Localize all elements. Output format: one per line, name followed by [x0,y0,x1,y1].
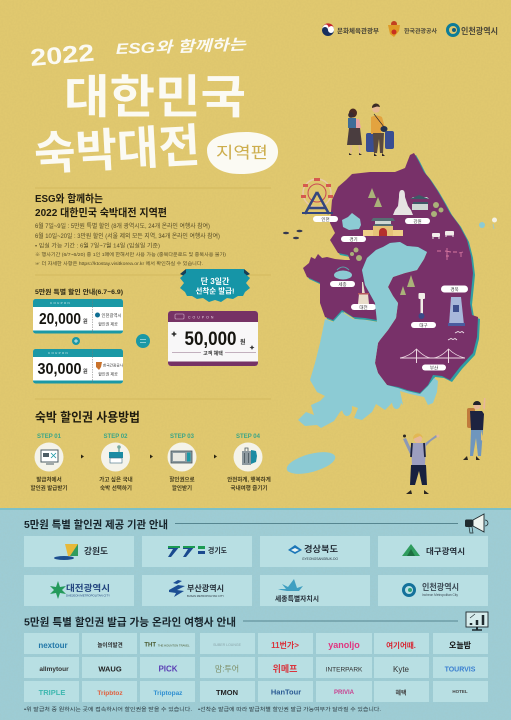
coupon: 30,000 [33,349,124,384]
ribbon badge: 단 3일간 [201,276,230,286]
coupon: 50,000: 원 [240,338,246,346]
agency cards row 1: nextour [38,641,68,650]
coupon: 30,000: 한국관광공사 [103,362,124,368]
icon: megaphone [465,514,488,533]
institution card: 경상북도: 경상북도 [304,544,338,554]
agency cards row 2: WAUG [98,664,122,674]
step 2: 숙박 선택하기 [100,484,132,492]
traveler: cheering person [403,433,440,494]
title: ESG와 함께하는 [116,36,248,58]
institution card: 대구광역시: 대구광역시 [426,546,465,556]
step 2: STEP 02 [104,434,128,440]
map: Sejong pond and label [330,267,355,288]
coupon: 50,000 [168,311,258,366]
institution card: 인천광역시: Incheon Metropolitan City [422,593,458,597]
footnote [24,705,381,713]
institution card: 경기도: 경기도 [208,545,227,555]
agency cards row 1: yanoljo [328,640,360,650]
agency cards row 3: Tripbtoz [97,690,123,697]
coupon: 30,000: COUPON [48,351,69,355]
section heading: institutions: 5만원 특별 할인권 제공 기관 안내 [24,518,168,531]
coupon: 20,000: 20,000 [39,311,81,328]
how-to heading: 숙박 할인권 사용방법 [35,410,140,424]
map: Incheon label [313,216,338,222]
agency cards row 3: Triptopaz [154,690,183,697]
coupon: 20,000 [33,299,123,334]
agency cards row 2: 위메프 [273,663,297,674]
coupon: 20,000: COUPON [50,301,71,305]
map: Sejong pond and label: 세종 [338,281,347,288]
agency cards row 3: TMON [216,688,238,697]
institution card: 대전광역시: DAEJEON METROPOLITAN CITY [66,594,110,598]
footnote: •위 발급처 중 원하시는 곳에 접속하시어 할인권을 받을 수 있습니다. [24,705,192,713]
institution card: 인천광역시: 인천광역시 [422,582,459,592]
ribbon badge: 선착순 발급! [195,286,235,296]
info text: 6월 10일~20일 : 3만원 할인 (서울 제외 모든 지역, 34개 온라인 여행사 참여) [35,232,220,240]
map: Daegu tower and label: 대구 [419,322,428,329]
arrow [214,454,217,458]
arrow [81,454,84,458]
info heading: 2022 대한민국 숙박대전 지역편 [35,206,167,219]
logo: 인천광역시: 인천광역시 [461,26,498,36]
coupon: 50,000: 50,000 [184,329,236,350]
map: pink flowers [437,248,463,260]
institution card: 세종특별자치시 [260,575,370,606]
map: Gangwon label [405,218,430,224]
map: lake and Gyeonggi icons [342,213,403,236]
agency cards row 3: HOTEL [452,689,468,694]
institution card: 대전광역시: 대전광역시 [66,583,110,593]
institution card: 경기도 [142,536,252,567]
plus circle [72,337,80,345]
step 4 [227,434,271,492]
ribbon badge [180,269,250,302]
agency cards row 1: THT THE HOUNTON TRAVEL [144,642,190,648]
map: Buddha statue and temple [393,190,429,215]
agency cards row 2: PICK [158,664,178,674]
agency logo grid [24,633,488,702]
title: 숙박대전 [33,119,201,180]
step 2: 가고 싶은 국내 [99,476,133,484]
agency cards row 2: allmytour [39,666,69,673]
agency cards row 3: PRIVIA [334,690,355,696]
coupon: 50,000: COUPON [188,316,215,320]
title: 2022 [29,40,95,72]
map: Busan bridge [400,349,465,363]
coupon: 20,000: 인천광역시 [102,312,122,319]
agency cards row 2 [24,657,488,678]
step 1 [31,434,67,492]
info text: • 입실 가능 기간 : 6월 7일~7월 14일 (입실일 기준) [35,242,160,250]
step 3 [168,434,196,492]
institution card: 인천광역시 [378,575,488,606]
coupon: 30,000: 원 [83,368,88,375]
map: Daegu tower and label [411,293,436,329]
agency cards row 1: 여기어때. [386,640,416,650]
agency cards row 2: TOURVIS [445,666,476,674]
map: trees [350,188,444,261]
coupon: 30,000: 할인권 제공 [98,370,118,376]
background: blue lower panel [0,508,511,720]
traveler: man with backpack [463,398,486,460]
info text: 6월 7일~9일 : 5만원 특별 할인 (8개 광역시도, 24개 온라인 여행사 참여) [35,222,210,230]
info text [35,222,226,267]
map: ferris wheel [301,178,333,214]
map: cows [432,231,454,239]
agency cards row 3: HanTour [271,688,301,696]
coupon subtitle: 5만원 특별 할인 안내(6.7~6.9) [35,287,123,296]
map: Gyeonggi label: 경기 [349,236,358,243]
institution card: 강원도: 강원도 [84,546,108,556]
map: Gyeongbuk stone pagoda [448,297,465,326]
logo: 한국관광공사 [388,21,437,37]
map: south sea overlay [298,242,438,428]
institution card: 부산광역시: BUSAN METROPOLITAN CITY [187,594,224,598]
divider [35,187,271,189]
institution card: 경상북도 [260,536,370,567]
agency cards row 3: 혜택 [395,689,407,697]
institution card: 강원도 [24,536,134,567]
institution card: 대구광역시 [378,536,488,567]
title: 대한민국 [64,71,246,123]
map: east sea islands [479,218,497,229]
step 1: 발급처에서 [36,476,62,484]
institution card: 대전광역시 [24,575,134,606]
institution card: 부산광역시 [142,575,252,606]
step 3: 할인받기 [172,484,192,492]
icon: monitor chart [466,612,488,630]
map: Gyeongbuk label: 경북 [450,286,459,293]
step 4: 안전하게, 행복하게 [227,476,271,484]
coupon: 30,000: 30,000 [38,361,82,378]
logo: 인천광역시 [448,24,498,36]
footnote: •선착순 발급에 따라 발급처별 할인권 발급 가능여부가 달라질 수 있습니다. [198,705,381,713]
map: fish [283,230,302,239]
map: mainland shadow and purple land [303,153,480,395]
divider [35,398,271,400]
map: Gyeongbuk label [441,286,468,293]
title [29,36,248,180]
badge: 지역편: 지역편 [216,144,268,162]
agency cards row 1: 놀이의발견 [97,641,123,649]
family illustration [347,103,394,156]
logo: 문화체육관광부 [322,23,379,36]
agency cards row 3: TRIPLE [39,688,65,697]
step 2 [99,434,133,492]
organiser logos [322,21,498,37]
institution card: 세종특별자치시: 세종특별자치시 [275,594,319,603]
coupon: 20,000: 원 [83,318,88,325]
map: Gyeonggi label [341,236,366,243]
map: Gangwon label: 강원 [413,218,422,224]
step 1: 할인권 발급받기 [31,484,67,492]
map: Busan label: 부산 [430,364,438,372]
coupon: 20,000: 할인권 제공 [98,320,118,326]
institution card: 경상북도: GYEONGSANGBUK-DO [302,556,338,561]
map: Jeju island [285,448,337,478]
info heading [35,192,167,219]
map: birds [448,332,464,340]
divider [35,274,271,276]
map: trees near Daegu [400,275,415,295]
agency cards row 1 [24,633,488,654]
agency cards row 3 [24,681,488,702]
coupon: 50,000: 고객 혜택 [203,350,223,357]
bottom panel top edge [0,508,511,510]
info text: ※ 행사기간 (6/7~6/20) 중 1인 1매에 한해서만 사용 가능 (중복다운로드 및 중복사용 불가) [35,251,226,258]
equals circle [136,334,150,348]
map: Busan label [422,364,446,372]
map: Daejeon tower and label [351,282,376,311]
agency cards row 2: INTERPARK [326,666,363,674]
map: Incheon label: 인천 [321,216,330,222]
info heading: ESG와 함께하는 [35,192,103,205]
step 3: 할인권으로 [169,476,195,484]
background: yellow paper [0,0,511,510]
agency cards row 2: Kyte [393,665,410,674]
institution card: 부산광역시: 부산광역시 [187,583,224,593]
agency cards row 1: SUBER LOUNGE [213,643,242,647]
step 4: 국내여행 즐기기 [231,484,267,492]
arrow [150,454,153,458]
info text: ☞ 더 자세한 사항은 https://ktostay.visitkorea.or.kr 에서 확인하실 수 있습니다. [35,260,203,267]
map: Daejeon tower and label: 대전 [359,304,368,311]
step 4: STEP 04 [236,434,261,440]
agency cards row 1: 11번가> [271,640,299,650]
agency cards row 2: 맘:투어 [215,664,239,674]
step 3: STEP 03 [170,434,195,440]
section heading: travel agencies: 5만원 특별 할인권 발급 가능 온라인 여행사 안내 [24,616,236,628]
logo: 문화체육관광부: 문화체육관광부 [337,26,379,35]
logo: 한국관광공사: 한국관광공사 [404,27,437,35]
badge: 지역편 [207,132,278,174]
step 1: STEP 01 [37,434,62,440]
agency cards row 1: 오늘밤 [449,640,472,650]
